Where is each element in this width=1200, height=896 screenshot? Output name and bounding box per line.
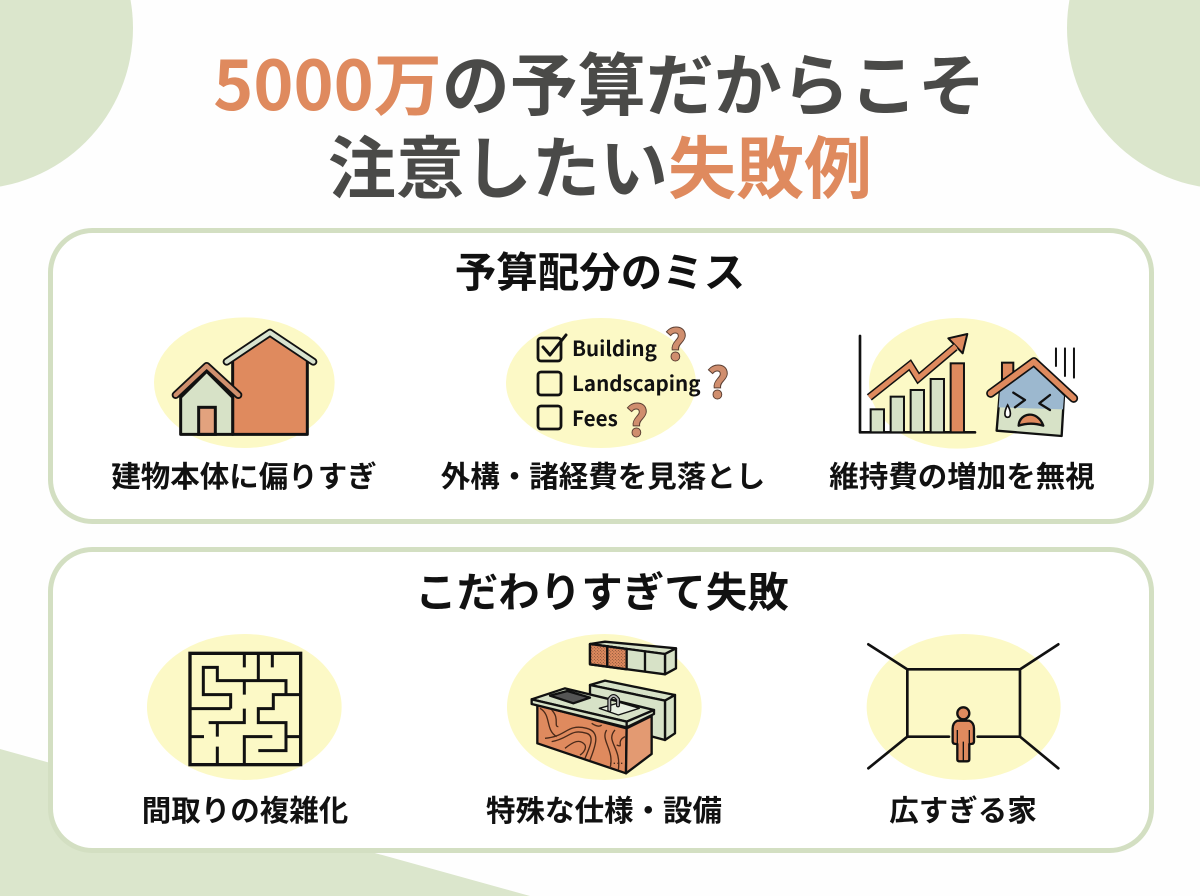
heading: budget allocation: 予算配分のミス: [455, 239, 745, 299]
background shape: bottom left wedge: [0, 749, 530, 896]
label: building: 建物本体に偏りすぎ: [111, 454, 377, 496]
icon: checklist: ?: [626, 388, 648, 449]
label: house too large: 広すぎる家: [889, 788, 1037, 830]
panel: budget allocation mistakes: [50, 230, 1152, 522]
label: landscaping and fees: 外構・諸経費を見落とし: [441, 454, 765, 496]
label: complex layout: 間取りの複雑化: [142, 788, 348, 830]
background shape: top right circle: [1067, 0, 1200, 189]
icon: oversized room with person: [867, 634, 1061, 780]
person: [953, 707, 974, 761]
label: special specifications: 特殊な仕様・設備: [486, 788, 722, 830]
icon: rising chart and sad house: [860, 318, 1074, 449]
icon: large and small house: [154, 317, 335, 448]
icon: custom kitchen: [507, 634, 702, 780]
panel: over-commitment failures: [50, 550, 1152, 850]
title: 5000万の予算だからこそ: [213, 31, 986, 130]
title: 注意したい失敗例: [328, 114, 872, 213]
icon: checklist: ?: [707, 350, 729, 411]
title: [213, 31, 986, 213]
heading: over-commitment: こだわりすぎて失敗: [415, 559, 789, 619]
icon: checklist: ?: [665, 312, 687, 373]
icon: checklist: [506, 312, 729, 449]
icon: checklist: Landscaping: [572, 367, 701, 397]
label: maintenance cost: 維持費の増加を無視: [829, 454, 1095, 496]
icon: maze floor plan: [147, 634, 342, 780]
background shape: top left circle: [0, 0, 133, 189]
icon: checklist: Building: [572, 332, 657, 362]
icon: checklist: Fees: [572, 402, 618, 432]
